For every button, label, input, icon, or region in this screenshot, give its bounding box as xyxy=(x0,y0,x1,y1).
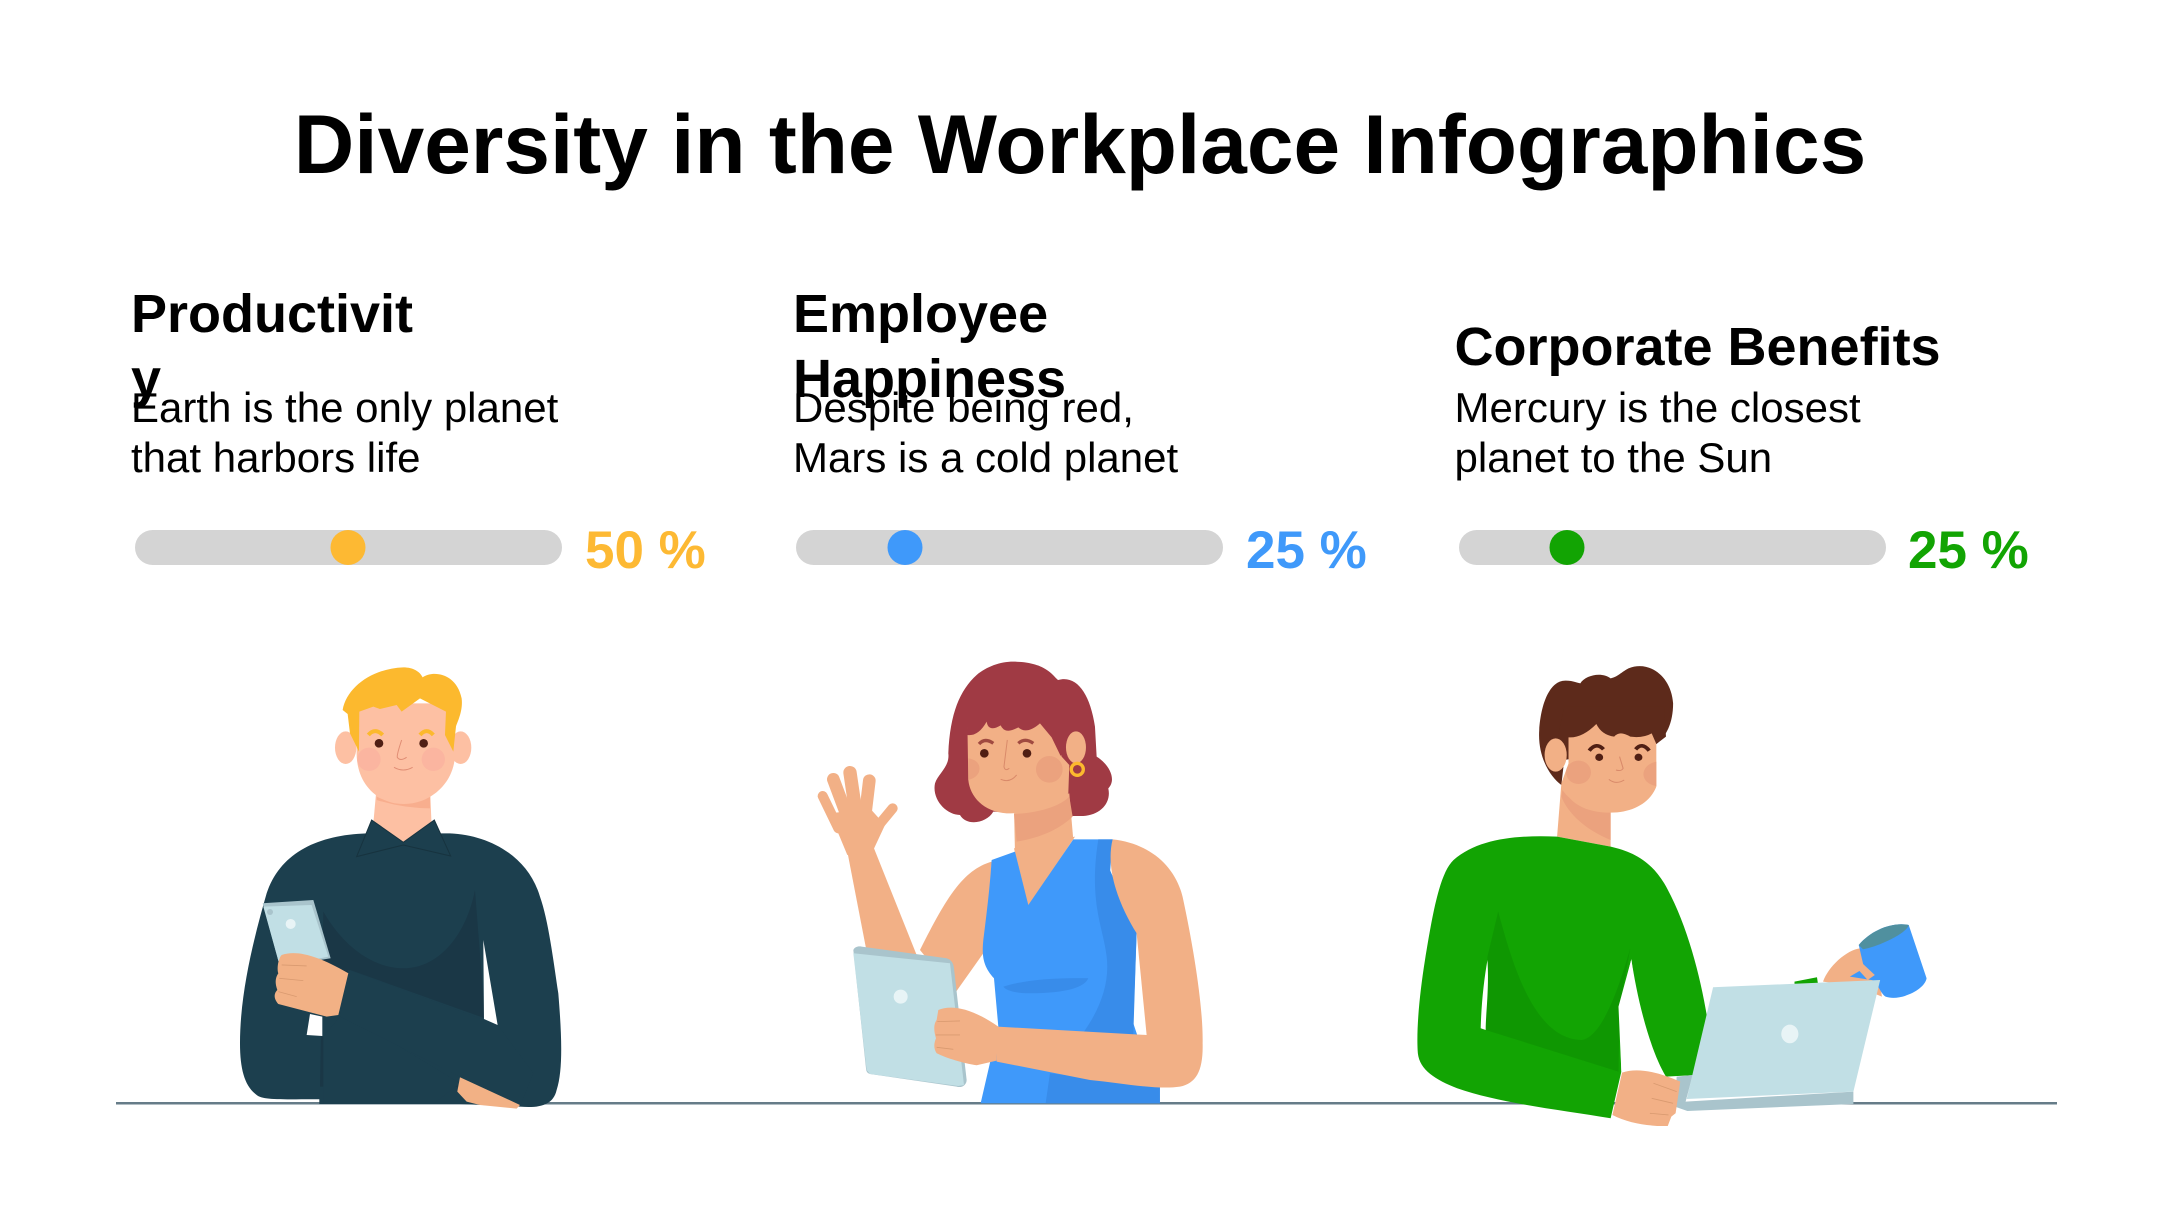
white gaps xyxy=(307,940,498,1036)
heading: productivity: y xyxy=(131,349,161,409)
title: Diversity in the Workplace Infographics xyxy=(294,97,1866,191)
hand xyxy=(275,953,348,1017)
eyes xyxy=(1595,754,1603,761)
raised arm xyxy=(847,847,917,955)
progress bar: 50 percent xyxy=(135,530,562,565)
cheeks xyxy=(1036,756,1063,783)
phone xyxy=(263,900,331,967)
heading: productivity: Productivit xyxy=(131,284,413,344)
fringe xyxy=(1557,707,1666,759)
dress shade xyxy=(1003,839,1160,1103)
value: 25 percent blue: 25 % xyxy=(1246,521,1367,580)
text: productivity description: Earth is the only planet xyxy=(131,384,559,431)
waving hand xyxy=(823,773,893,832)
hair xyxy=(1539,666,1673,785)
nose and smile xyxy=(1609,757,1624,782)
earring xyxy=(1071,763,1083,775)
illustration: woman waving with tablet xyxy=(823,662,1203,1103)
white gap xyxy=(1481,960,1488,1030)
eyebrows xyxy=(979,740,1033,744)
text: corporate benefits description: Mercury is the closest xyxy=(1454,384,1861,431)
cheeks xyxy=(357,748,381,771)
ears xyxy=(335,731,471,764)
nose and smile xyxy=(1001,740,1017,781)
text: productivity description: that harbors life xyxy=(131,434,420,481)
panel: productivity xyxy=(131,284,706,580)
eyebrows xyxy=(1589,746,1649,751)
heading: employee happiness: Happiness xyxy=(793,349,1066,409)
table line xyxy=(116,1102,2057,1104)
laptop xyxy=(1675,1075,1853,1111)
text: employee happiness description: Mars is a cold planet xyxy=(793,434,1179,481)
forearm xyxy=(340,970,533,1107)
right arm xyxy=(997,839,1203,1088)
face xyxy=(357,703,455,804)
fringe xyxy=(967,703,1077,756)
collar xyxy=(357,820,451,857)
mug hand xyxy=(1823,948,1882,997)
value: 50 percent: 50 % xyxy=(585,521,706,580)
ear xyxy=(1066,731,1086,763)
progress bar: 25 percent green xyxy=(1459,530,1886,565)
value: 25 percent green: 25 % xyxy=(1908,521,2029,580)
heading: corporate benefits: Corporate Benefits xyxy=(1454,317,1941,377)
eyes xyxy=(375,739,383,748)
face xyxy=(967,720,1069,813)
panel: employee happiness xyxy=(793,284,1367,580)
hand under sleeve xyxy=(457,1077,520,1109)
nose and smile xyxy=(394,740,413,770)
eyes xyxy=(980,749,989,758)
eyebrows xyxy=(368,731,433,735)
ear xyxy=(1545,738,1567,772)
hair xyxy=(935,662,1112,822)
neck xyxy=(1557,783,1611,847)
sweater xyxy=(1417,836,1707,1118)
hair xyxy=(343,667,462,752)
hand on tablet xyxy=(934,1008,998,1065)
hand on laptop xyxy=(1612,1070,1680,1126)
panel: corporate benefits xyxy=(1454,317,2029,580)
illustration: man with phone xyxy=(240,667,561,1109)
chest skin xyxy=(1014,837,1075,907)
neck xyxy=(1014,793,1073,853)
illustration: man with laptop and mug xyxy=(1417,666,1927,1126)
dress xyxy=(981,839,1160,1103)
sweater shade xyxy=(1486,912,1630,1072)
progress bar: 25 percent blue xyxy=(796,530,1223,565)
sweater xyxy=(240,820,561,1107)
heading: employee happiness: Employee xyxy=(793,284,1048,344)
far sleeve xyxy=(1794,977,1818,987)
tablet xyxy=(853,946,967,1087)
text: corporate benefits description: planet to the Sun xyxy=(1454,434,1772,481)
cheeks xyxy=(1566,761,1591,784)
neck xyxy=(373,787,432,847)
left upper arm xyxy=(920,862,992,993)
face xyxy=(1561,720,1656,813)
text: employee happiness description: Despite being red, xyxy=(793,384,1134,431)
mug xyxy=(1850,924,1927,998)
sweater shade xyxy=(320,890,485,1087)
